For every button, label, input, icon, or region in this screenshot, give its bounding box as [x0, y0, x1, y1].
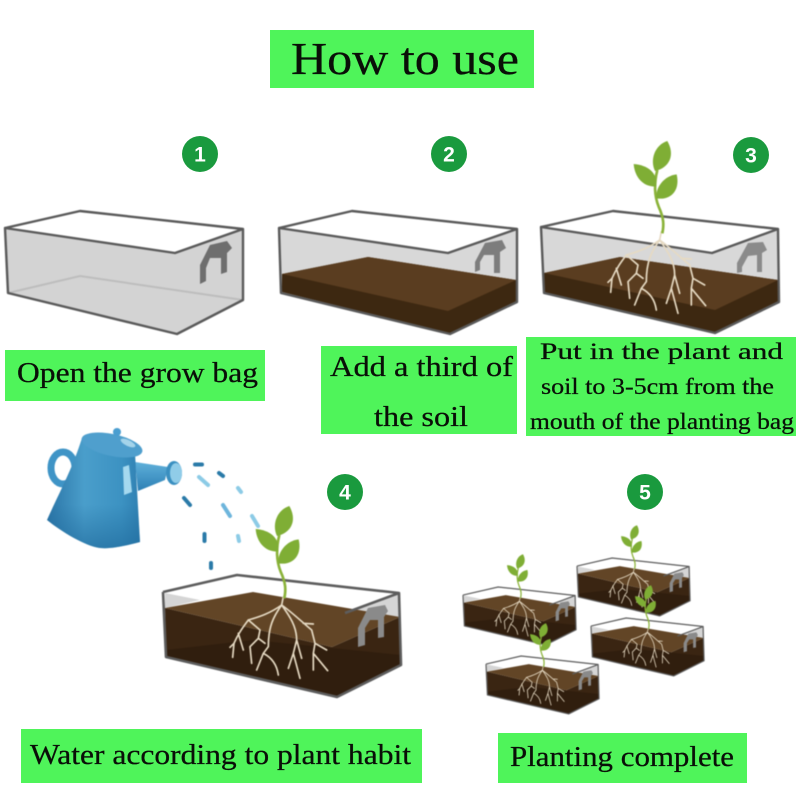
- caption: step 5: [498, 733, 747, 783]
- caption: step 2: [321, 346, 517, 434]
- bag: middle right: [591, 585, 704, 676]
- caption: step 4: [21, 729, 422, 783]
- bag: middle left: [463, 554, 576, 645]
- illustration: group of finished bags: [463, 525, 704, 714]
- caption: step 5: Planting complete: [510, 742, 734, 773]
- caption: step 3: [526, 337, 796, 436]
- step 4 number badge: [327, 474, 363, 510]
- illustration: bag with plant added: [541, 141, 779, 333]
- illustration: watering can with water drops: [47, 428, 258, 568]
- step 2 number badge: [431, 136, 467, 172]
- step 1 number badge: 1: [194, 144, 206, 166]
- step 5 number badge: [627, 474, 663, 510]
- title: How to use: [291, 33, 519, 84]
- step 2 number badge: 2: [443, 144, 455, 166]
- step 1 number badge: [182, 136, 218, 172]
- bag: back right: [577, 525, 690, 616]
- caption: step 3: soil to 3-5cm from the: [541, 374, 774, 399]
- step 4 number badge: 4: [339, 482, 351, 504]
- bag: front: [486, 623, 599, 714]
- title: [270, 30, 534, 88]
- illustration: empty open grow bag: [5, 211, 243, 334]
- step 3 number badge: 3: [745, 144, 757, 168]
- step 5 number badge: 5: [639, 482, 651, 504]
- step 3 number badge: [733, 137, 769, 173]
- caption: step 4: Water according to plant habit: [30, 740, 411, 771]
- illustration: bag with a third of soil: [279, 211, 517, 334]
- caption: step 1: [5, 350, 265, 401]
- illustration: watered bag with plant: [163, 506, 401, 697]
- caption: step 3: mouth of the planting bag: [530, 409, 795, 434]
- caption: step 2: the soil: [374, 402, 468, 433]
- caption: step 2: Add a third of: [330, 352, 514, 383]
- caption: step 1: Open the grow bag: [17, 358, 258, 389]
- caption: step 3: Put in the plant and: [540, 339, 784, 364]
